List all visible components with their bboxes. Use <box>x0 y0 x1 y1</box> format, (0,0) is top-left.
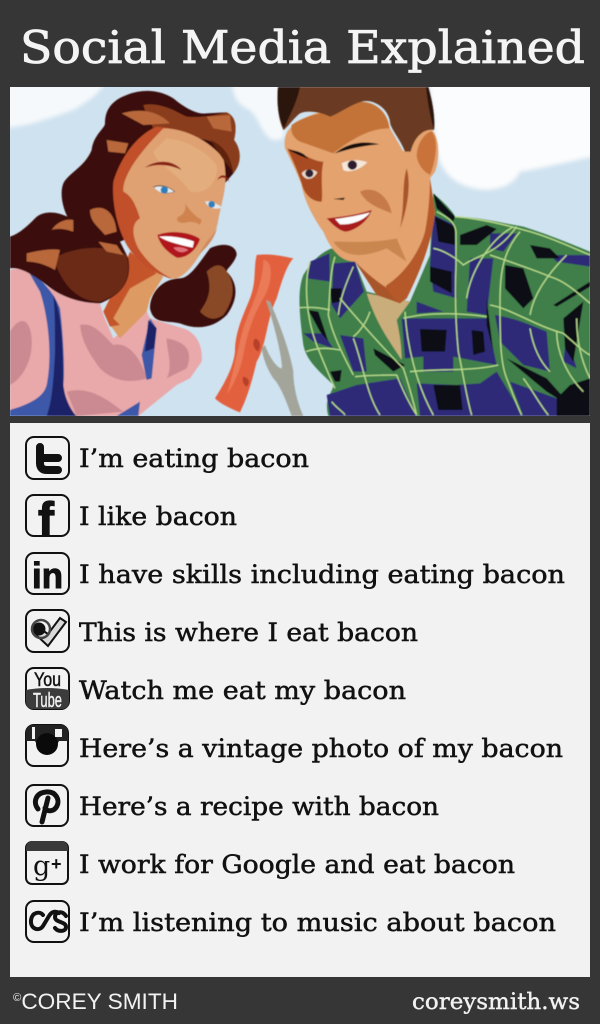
right curl <box>150 245 237 327</box>
row: Foursquare: This is where I eat bacon <box>79 618 418 647</box>
icon: YouTube <box>26 668 69 712</box>
row: YouTube <box>26 668 406 712</box>
row: Pinterest: Here’s a recipe with bacon <box>79 792 439 821</box>
icon: Google Plus: g <box>33 851 50 882</box>
row: Google Plus <box>26 841 515 884</box>
features <box>288 142 379 159</box>
icon: Instagram <box>26 725 68 766</box>
row: Instagram: Here’s a vintage photo of my bacon <box>79 734 563 763</box>
man <box>278 87 590 416</box>
footer credit: © <box>13 992 21 1004</box>
row: Instagram <box>26 725 563 766</box>
footer website: coreysmith.ws <box>412 990 580 1015</box>
row: Last.fm: I’m listening to music about bacon <box>79 908 556 937</box>
row: Facebook: I like bacon <box>79 502 237 531</box>
row: YouTube: Watch me eat my bacon <box>79 676 406 705</box>
row: Last.fm <box>26 901 556 942</box>
fork <box>262 300 303 416</box>
icon: Foursquare <box>26 610 69 652</box>
icon: LinkedIn: in <box>32 555 63 596</box>
row: LinkedIn: I have skills including eating bacon <box>79 560 565 589</box>
plaid lines <box>299 212 590 415</box>
row: Google Plus: I work for Google and eat bacon <box>79 850 515 879</box>
icon: Last.fm <box>26 901 69 942</box>
icon: Google Plus: + <box>51 854 62 874</box>
hair <box>10 91 240 303</box>
row: LinkedIn <box>26 553 565 596</box>
bacon <box>215 255 293 412</box>
icon: Facebook: f <box>38 494 55 547</box>
icon: Google Plus <box>26 841 68 884</box>
clouds <box>10 87 590 192</box>
row: Facebook <box>26 494 237 547</box>
icon: YouTube: Tube <box>33 690 62 712</box>
panel: social network list <box>10 423 590 977</box>
row: Twitter: I’m eating bacon <box>79 444 309 473</box>
face <box>285 103 438 303</box>
woman <box>10 91 303 416</box>
icon: YouTube: You <box>34 670 61 691</box>
row: Pinterest <box>26 785 439 826</box>
footer credit: COREY SMITH <box>21 989 178 1014</box>
row: Twitter <box>26 437 309 479</box>
icon: Facebook <box>26 494 69 547</box>
row: Foursquare <box>26 610 418 652</box>
title: Social Media Explained <box>20 21 585 74</box>
icon: Pinterest <box>26 785 68 826</box>
hair <box>278 87 434 152</box>
icon: Twitter <box>26 437 69 479</box>
face <box>113 127 225 279</box>
illustration: couple sharing bacon <box>0 75 600 416</box>
shirt checks <box>303 193 590 416</box>
